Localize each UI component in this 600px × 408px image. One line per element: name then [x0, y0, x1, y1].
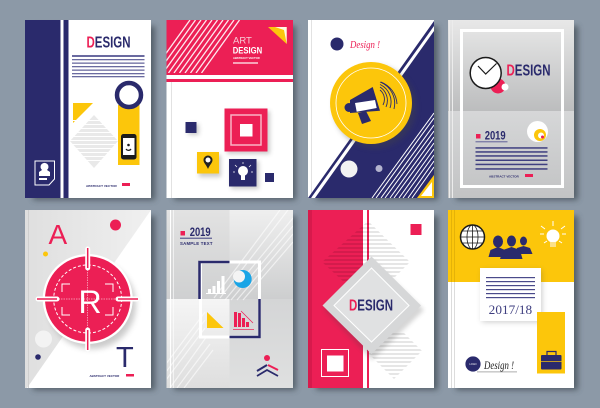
heading: design: DESIGN [349, 298, 393, 315]
script text: Design ! [349, 39, 380, 51]
panel: cover 2 art design: DESIGN [233, 46, 262, 56]
red square [224, 108, 268, 152]
shadows [188, 111, 270, 189]
yellow triangle corner [417, 175, 434, 198]
panel: cover 2 art design: ABSTRACT VECTOR [233, 56, 260, 60]
icon tile: light bulb [229, 159, 256, 186]
year block: SAMPLE TEXT [180, 241, 213, 246]
panel: cover 1 navy design [25, 20, 151, 198]
heading: design: DESIGN [506, 62, 550, 80]
yellow badge with megaphone [330, 62, 412, 144]
icon: document profile [35, 161, 54, 185]
panel: cover 8 team [448, 210, 574, 388]
year block: 2019 [190, 225, 211, 239]
card shadow [482, 270, 542, 322]
year block [180, 225, 213, 246]
navy ring [117, 83, 141, 107]
icon: business people [488, 236, 532, 259]
footer text: ABSTRACT VECTOR [90, 374, 120, 378]
footer text: ABSTRACT VECTOR [489, 174, 520, 178]
yellow bar [118, 105, 140, 165]
heading: design: DESIGN [86, 35, 130, 52]
footer text: ABSTRACT VECTOR [86, 184, 117, 188]
navy dot [330, 38, 344, 50]
yellow triangle [73, 103, 93, 123]
white card: 2017/18 [489, 302, 532, 317]
year block: 2019 [485, 128, 506, 142]
icon: globe [460, 225, 484, 249]
navy small square [186, 122, 196, 133]
dots [110, 220, 121, 230]
target circles [527, 121, 548, 142]
panel: cover 4 clock [448, 20, 574, 198]
panel: cover 5 art target [25, 210, 151, 388]
stripes [372, 113, 434, 198]
logo mark [257, 355, 278, 376]
icon: briefcase [541, 352, 562, 370]
script text: Design ! [483, 358, 514, 372]
logo [465, 356, 481, 372]
panel: cover 3 megaphone [308, 20, 434, 198]
text lines [476, 147, 548, 170]
target shadow [48, 261, 136, 349]
crosshair ticks [38, 249, 137, 349]
navy diagonal band [315, 31, 434, 198]
panel: cover 7 diamond [308, 210, 434, 388]
yellow corner triangle [268, 27, 287, 44]
icon: megaphone [344, 87, 380, 124]
red small square [410, 224, 422, 235]
white card [480, 268, 541, 321]
yellow triangle [207, 312, 224, 328]
grey diamond [322, 256, 421, 354]
circle shadow [334, 66, 416, 148]
yellow block [537, 312, 565, 374]
icon: clock [470, 58, 508, 94]
logo: LOGO [469, 363, 477, 366]
diagonal stripes [166, 20, 240, 73]
chart panel frame [200, 262, 260, 337]
icon tile: location pin [197, 152, 219, 174]
year block [476, 128, 508, 142]
letter T: T [116, 342, 134, 374]
letter R: R [78, 284, 102, 320]
text lines [72, 55, 144, 77]
icon: light bulb [540, 221, 566, 247]
striped diamonds [320, 224, 424, 378]
heading: art design: ART [233, 36, 252, 46]
panel: cover 2 art design [166, 20, 293, 198]
icon: blue crescent [233, 270, 252, 288]
striped diamond [70, 115, 118, 168]
navy small square 2 [265, 173, 274, 182]
icon: smartphone [121, 134, 136, 160]
circles [340, 160, 358, 178]
icon: red bar chart [233, 311, 254, 330]
nested square [322, 350, 348, 376]
target circle [37, 248, 138, 350]
letter A: A [48, 219, 68, 250]
diamond shadow [324, 260, 424, 360]
panel: cover 6 charts [166, 210, 293, 388]
icon: bar chart white [206, 276, 226, 294]
